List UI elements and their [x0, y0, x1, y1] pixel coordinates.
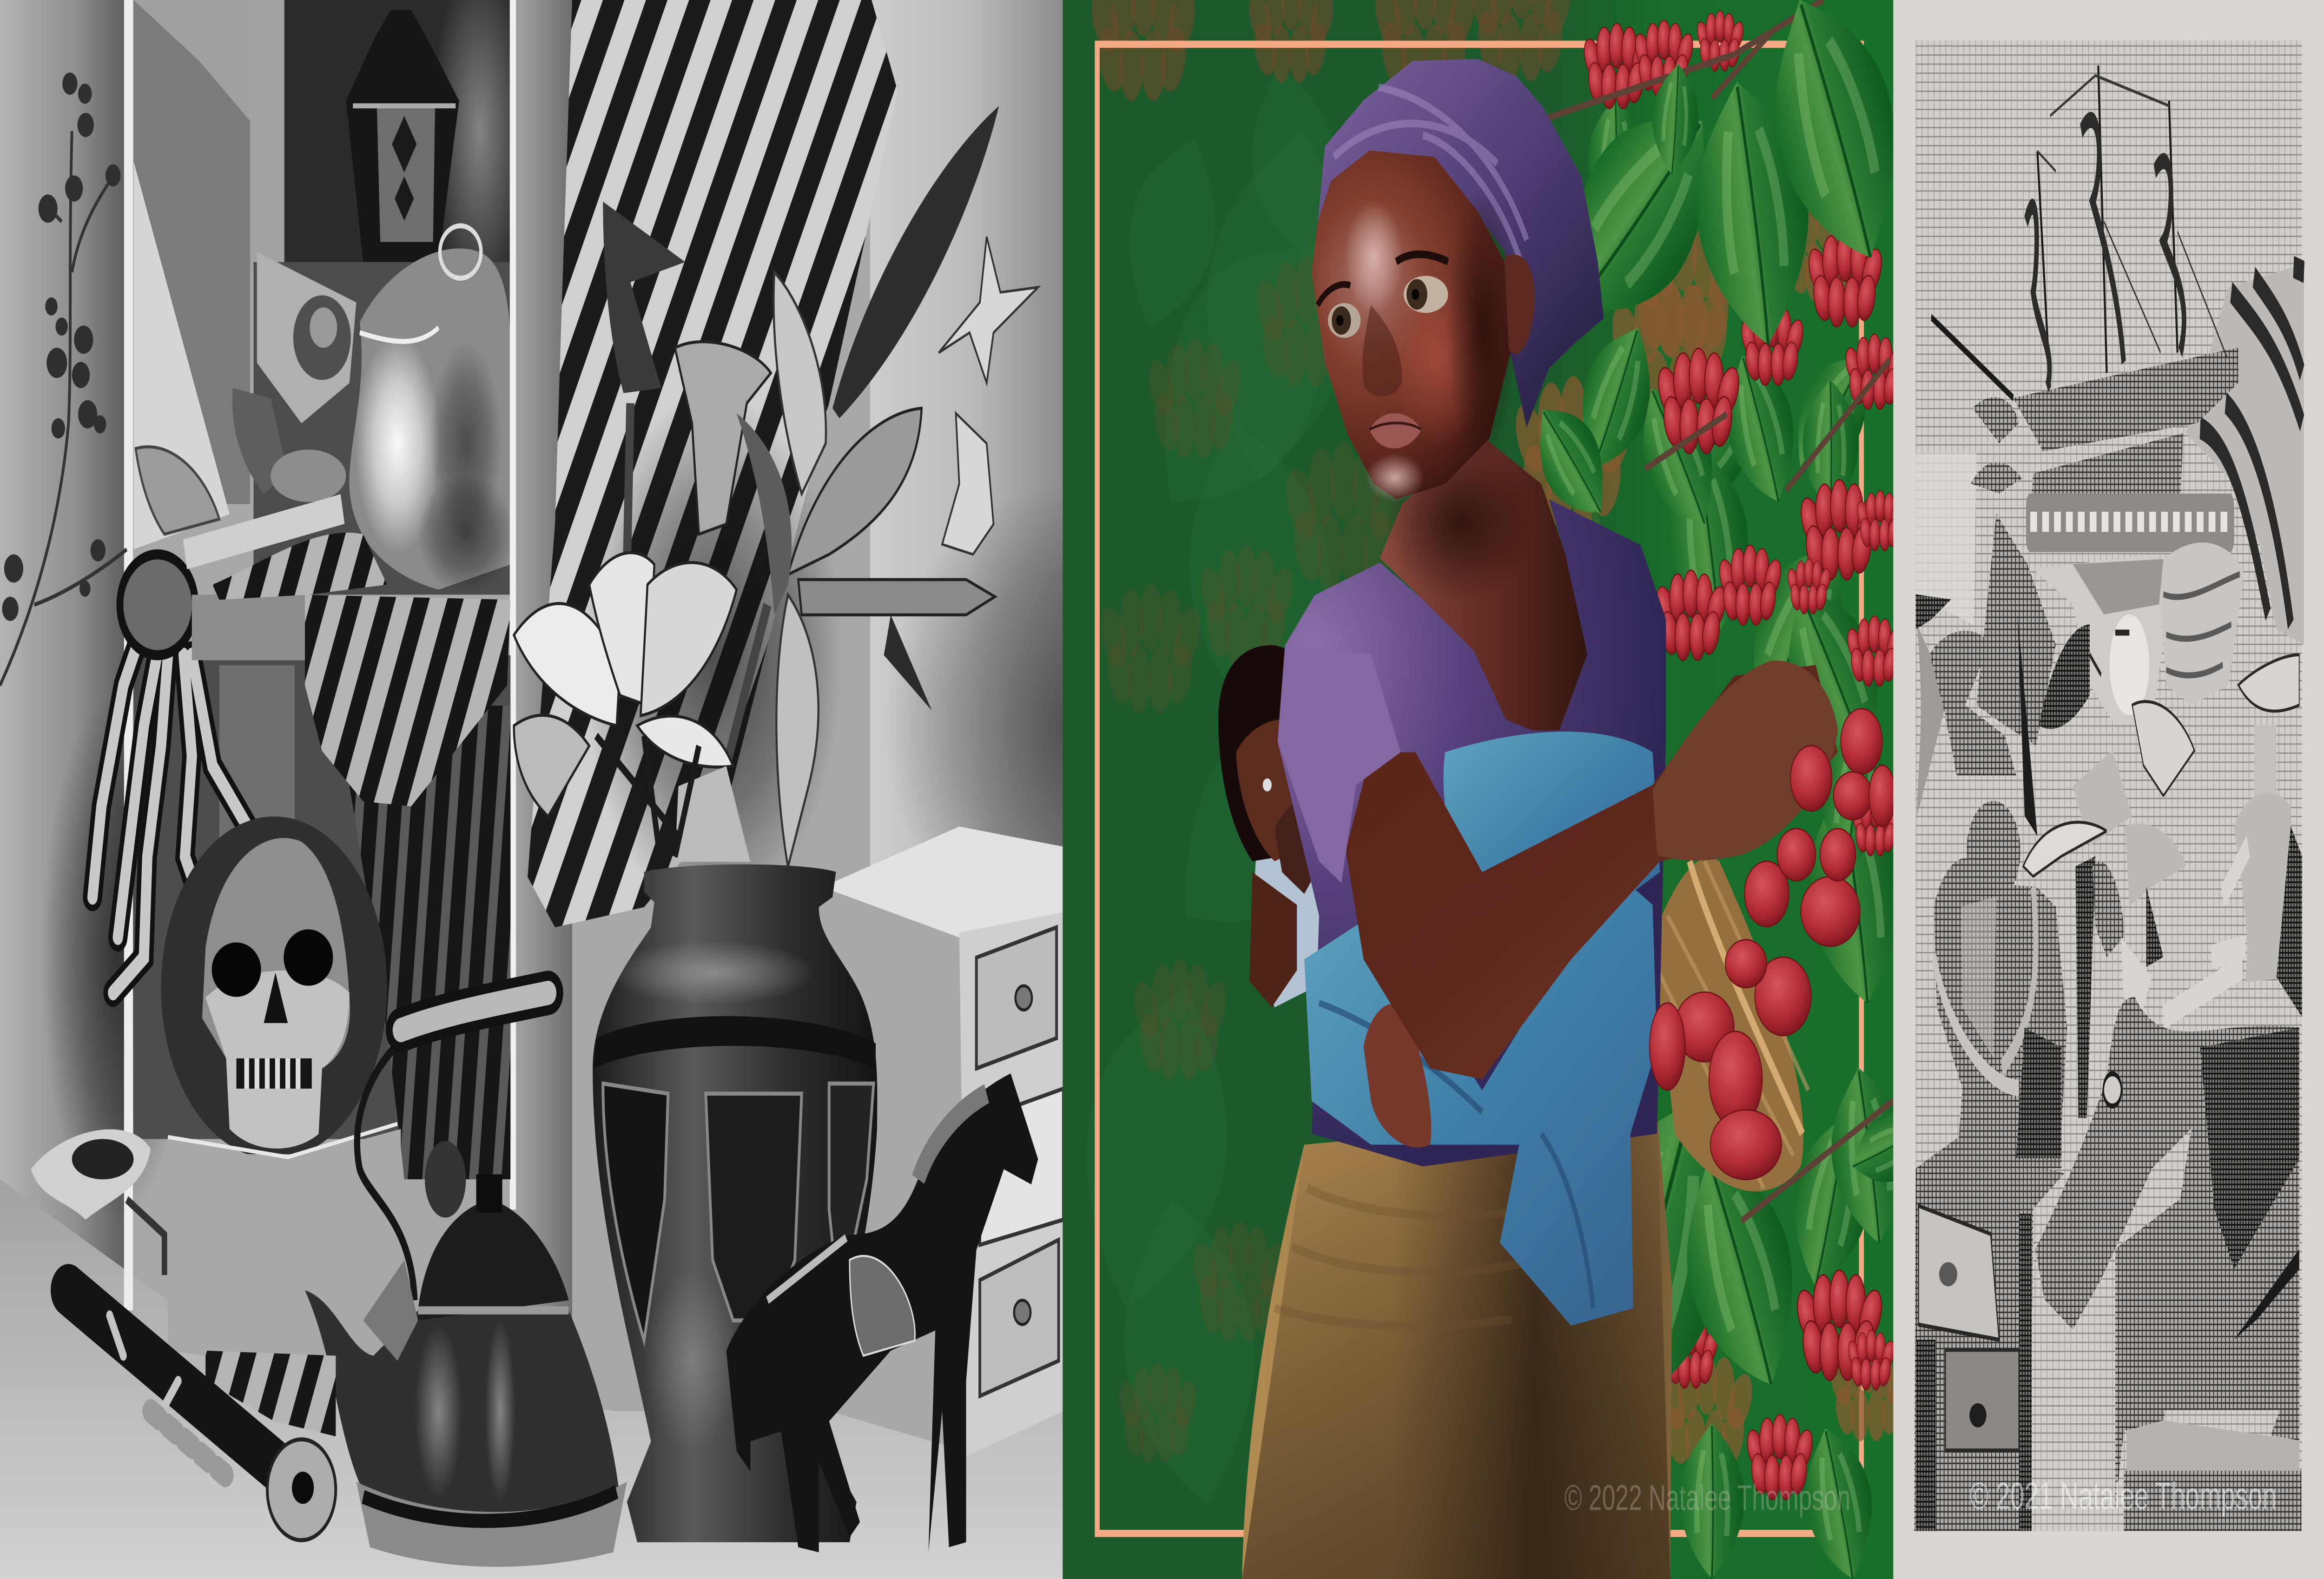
region below neck	[2032, 1309, 2115, 1531]
wall shadow right	[885, 484, 1241, 968]
scarf upper stripes	[212, 533, 387, 600]
top background berry clusters	[1086, 0, 1576, 101]
paper	[1893, 0, 2324, 1579]
shirt	[1278, 499, 1666, 1167]
baby foot	[1364, 1004, 1431, 1148]
alcove lit side	[432, 0, 528, 303]
dark alcove	[284, 0, 510, 282]
pitcher	[349, 226, 514, 595]
rose and leaves	[232, 252, 357, 502]
cherub face	[2033, 554, 2163, 725]
post right white line	[510, 0, 516, 1209]
post right	[510, 0, 572, 1371]
lower alcove	[133, 655, 510, 1139]
floor	[0, 1179, 1063, 1579]
background foliage	[1060, 53, 1375, 1521]
light strip	[250, 0, 284, 272]
berry branch	[0, 73, 127, 686]
ship	[1931, 66, 2238, 451]
left lily	[1915, 595, 2016, 816]
neck shadow	[1386, 445, 1534, 602]
copyright 2022: © 2022 Natalee Thompson	[1565, 1478, 1850, 1518]
dark pointed leaf	[2018, 614, 2037, 836]
sleeve	[1278, 645, 1400, 883]
copyright 2021: © 2021 Natalee Thompson	[1970, 1474, 2277, 1517]
foliage mid layer	[1521, 95, 1932, 1579]
skeleton hand	[92, 555, 271, 993]
shelf block	[192, 595, 308, 660]
cabinet	[821, 826, 1063, 1456]
horse	[726, 1073, 1038, 1553]
post left white line	[124, 0, 133, 1310]
peach frame	[1097, 44, 1862, 1533]
light area left	[1915, 453, 1976, 625]
lower background grid	[2115, 1199, 2180, 1511]
face	[1312, 151, 1535, 502]
wing	[2159, 542, 2244, 705]
wing feathers	[2163, 574, 2240, 675]
crown band	[2026, 494, 2234, 552]
curtain shade	[582, 393, 843, 917]
right side brown berries	[1510, 142, 1911, 1472]
central flowers	[2023, 701, 2194, 1118]
blue sling	[1304, 732, 1660, 1326]
kettle handle	[357, 993, 548, 1300]
dark leaf fan	[2039, 625, 2090, 729]
back panel	[133, 0, 250, 504]
column under shelf	[219, 665, 295, 867]
large branch leaves	[1535, 0, 1925, 1461]
pedestal box	[168, 1129, 401, 1371]
wall right	[870, 0, 1063, 887]
red berry clusters	[1581, 11, 1906, 1500]
baby	[1218, 645, 1327, 1007]
striped curtain right	[2186, 264, 2304, 645]
crown support	[2030, 433, 2183, 514]
hatched ground	[1915, 40, 2302, 1531]
vase	[593, 864, 877, 1542]
small flowers	[939, 237, 1038, 555]
panel: coffee picker painting	[1060, 0, 1932, 1579]
shelf zone	[253, 262, 510, 595]
curtain striped	[528, 0, 898, 927]
drawing mapped group	[1914, 40, 2304, 1531]
bone on shelf	[185, 509, 343, 555]
woman's arm	[1346, 665, 1838, 1079]
neck and chest	[1380, 436, 1587, 730]
striped cloth on floor	[205, 1351, 336, 1436]
step platform	[2124, 1355, 2302, 1531]
wall left	[0, 0, 127, 1310]
striped hanging drape	[350, 706, 510, 1179]
cabinet	[1914, 1138, 2064, 1531]
wall left shadow	[41, 695, 192, 1220]
skull	[202, 838, 350, 1149]
leaf on shelf	[136, 447, 219, 534]
left curtain	[1976, 514, 2056, 746]
panel upper shade	[133, 0, 250, 121]
leaves near ship	[1971, 397, 2022, 494]
lily cluster	[603, 202, 995, 867]
crown beads	[2030, 517, 2232, 527]
kettle	[305, 1141, 627, 1567]
pedestal top edge	[168, 1124, 397, 1157]
horse head and neck	[2035, 997, 2299, 1410]
foreground branch	[1645, 360, 1893, 1221]
background foliage right	[1541, 0, 1894, 1579]
skirt	[1242, 1112, 1672, 1579]
scarf	[305, 595, 510, 806]
seated figure	[1934, 801, 2067, 1169]
basket	[1652, 858, 1808, 1191]
large red berries	[1650, 708, 1895, 1180]
green background	[1063, 0, 1894, 1579]
lantern	[346, 10, 459, 262]
mid background berry clusters	[1096, 256, 1406, 1463]
long dark lily leaf	[832, 106, 999, 418]
panel light wedge	[133, 161, 230, 549]
shadow form behind skull	[161, 816, 387, 1159]
hand	[1652, 661, 1838, 860]
panel: charcoal still life	[0, 0, 1241, 1579]
panel: pen cross-hatch drawing	[1893, 0, 2324, 1579]
flute	[68, 1290, 336, 1540]
headscarf	[1318, 59, 1604, 427]
big white lily	[514, 553, 750, 867]
doll figure	[2163, 655, 2302, 1017]
oyster shell	[31, 1130, 165, 1275]
basket strap	[1593, 512, 1657, 872]
